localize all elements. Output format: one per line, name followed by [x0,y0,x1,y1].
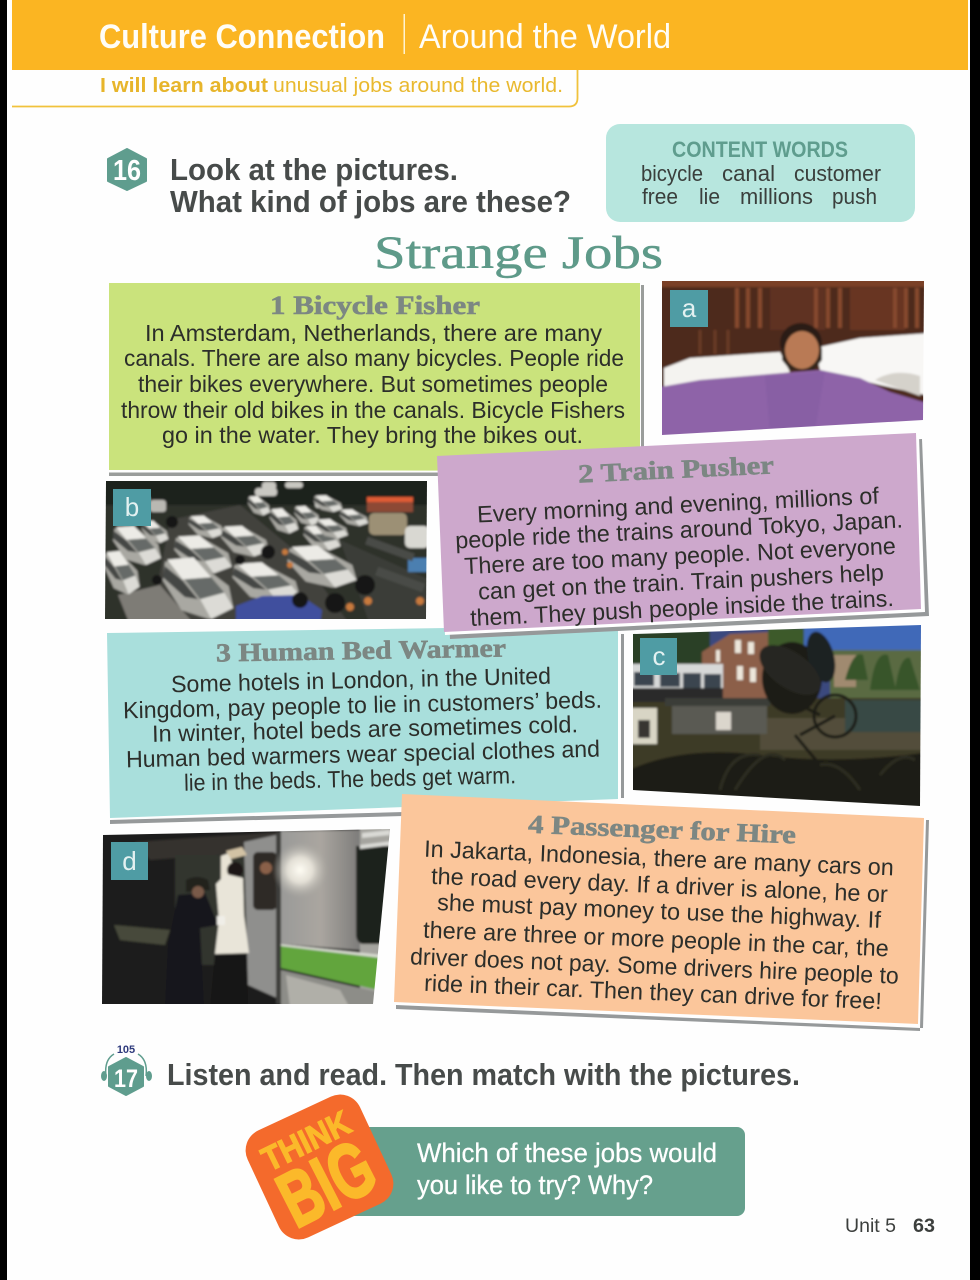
panel 2 body text: There are too many people. Not everyone [464,533,896,579]
content words box [606,124,915,222]
photo a label: a [682,293,697,323]
activity 16 badge: 16 [113,155,141,187]
think big question: Which of these jobs would [417,1138,717,1168]
activity 17 audio badge [101,1044,152,1095]
panel 2 body text: people ride the trains around Tokyo, Japan. [455,506,903,554]
think big question: you like to try? Why? [417,1170,653,1200]
panel 2 body text: them. They push people inside the trains. [470,585,894,631]
panel 3 body text: Human bed warmers wear special clothes and [126,736,600,772]
panel 2 heading: 2 Train Pusher [577,450,775,489]
photo d label: d [122,846,137,876]
photo b label [113,489,151,526]
panel 1 body text: canals. There are also many bicycles. People ride [124,345,624,371]
photo c label [640,638,677,675]
content words list: millions [740,184,813,209]
activity 17 instruction: Listen and read. Then match with the pictures. [167,1057,800,1092]
think big question [417,1138,717,1200]
content words list: bicycle [641,161,703,186]
audio track number: 105 [117,1044,135,1056]
learning goal tab [12,70,578,106]
panel 3 body text: Some hotels in London, in the United [171,663,551,697]
content words list: push [832,184,877,209]
photo d: train pusher on a platform [102,829,390,1004]
activity 16 badge [108,149,146,190]
activity 16 instruction [170,152,571,219]
panel 2 body text [455,483,903,631]
panel 4 body text: she must pay money to use the highway. If [437,889,882,933]
think big callout [238,1087,745,1247]
panel 4: Passenger for Hire [394,794,929,1031]
content words list: lie [699,184,720,209]
panel 4 body text: the road every day. If a driver is alone, he or [431,863,889,907]
panel 4 body text [410,836,899,1014]
learning goal tab: unusual jobs around the world. [273,75,563,97]
header subtitle: Around the World: Around the World [419,18,671,56]
panel 4 body text: driver does not pay. Some drivers hire people to [410,943,899,989]
panel 3 body text: In winter, hotel beds are sometimes cold. [152,711,578,747]
panel 1 body text: throw their old bikes in the canals. Bicycle Fishers [121,397,625,423]
panel 1 body text: their bikes everywhere. But sometimes people [138,371,608,397]
header divider [404,14,405,54]
panel 1 body text: In Amsterdam, Netherlands, there are many [145,320,602,346]
think big badge [238,1087,401,1247]
header title: Culture Connection: Culture Connection [99,18,385,56]
panel 2 body text: Every morning and evening, millions of [477,483,880,527]
panel 3 body text: Kingdom, pay people to lie in customers’ beds. [123,687,602,723]
learning goal text: I will learn about [100,75,268,97]
think big badge: THINK [256,1104,357,1179]
main title: Strange Jobs: Strange Jobs [374,227,663,279]
content words heading: CONTENT WORDS [672,137,848,162]
panel 3 body text: lie in the beds. The beds get warm. [184,762,516,796]
activity 16 instruction: Look at the pictures. [170,152,458,187]
content words list: customer [794,161,881,186]
photo a: man lying in a bed [662,281,924,435]
content words list [641,161,881,209]
panel 1 heading: 1 Bicycle Fisher [270,291,480,320]
content words list: free [642,184,678,209]
page footer: unit and page number [845,1216,935,1237]
panel 2 body text: can get on the train. Train pushers help [478,559,884,605]
photo b: traffic jam [105,481,427,619]
page footer: unit and page number: Unit 5 [845,1216,896,1237]
panel 3: Human Bed Warmer [107,619,624,824]
activity 16 instruction: What kind of jobs are these? [170,184,571,219]
activity 17 audio badge: 17 [114,1065,138,1093]
photo c label: c [652,641,666,671]
panel 4 body text: ride in their car. Then they can drive for free! [424,970,882,1014]
panel 1: Bicycle Fisher [109,283,644,476]
think big badge: BIG [264,1122,389,1244]
photo b label: b [125,492,139,522]
panel 4 body text: there are three or more people in the car, the [423,917,889,961]
photo c: bicycle pulled from a canal [633,625,921,806]
header banner [12,0,968,70]
panel 2: Train Pusher [437,433,929,639]
panel 4 heading: 4 Passenger for Hire [528,810,797,849]
page footer: unit and page number: 63 [913,1216,935,1237]
panel 4 body text: In Jakarta, Indonesia, there are many cars on [424,836,894,880]
photo d label [111,842,148,880]
panel 1 body text: go in the water. They bring the bikes out. [162,422,583,448]
photo a label [670,290,708,327]
content words list: canal [722,161,775,186]
panel 3 body text [123,663,602,796]
panel 1 body text [121,320,625,448]
panel 3 heading: 3 Human Bed Warmer [216,633,506,668]
